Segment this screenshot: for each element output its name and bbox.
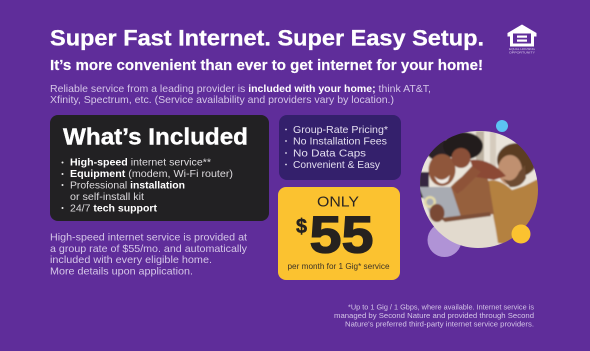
man's hair (497, 143, 537, 177)
icon: yellow circle (512, 224, 530, 244)
icon: equal housing opportunity logo (508, 24, 536, 54)
panel: benefits list: Convenient & Easy (293, 160, 381, 171)
text block: rate description: a group rate of $55/mo. and automatically (50, 244, 248, 255)
subtitle: It’s more convenient than ever to get internet for your home! (50, 58, 483, 74)
icon: equal housing opportunity logo: EQUAL HOUSING (509, 47, 535, 51)
intro paragraph (50, 84, 431, 106)
icon: equal housing opportunity logo: OPPORTUNITY (509, 50, 535, 54)
tablet (419, 187, 461, 217)
woman's shirt (450, 176, 494, 217)
footnote: managed by Second Nature and provided through Second (334, 311, 534, 320)
price caption: per month for 1 Gig* service (288, 261, 390, 271)
child's hair (443, 132, 483, 160)
icon: blue circle (496, 120, 508, 132)
infographic canvas (50, 24, 538, 328)
footnote: *Up to 1 Gig / 1 Gbps, where available. Internet service is (348, 302, 534, 312)
list of included items: 24/7 tech support (70, 204, 158, 214)
footnote (334, 302, 534, 328)
text block: rate description: More details upon application. (50, 266, 193, 278)
table surface (428, 216, 500, 248)
footnote: Nature's preferred third-party internet service providers. (345, 320, 534, 328)
list of included items: Professional installation (70, 180, 185, 192)
man's beard (503, 165, 526, 187)
child's arm (453, 166, 480, 193)
list of included items: Equipment (modem, Wi-Fi router) (70, 169, 233, 180)
child's back (470, 160, 506, 180)
list of included items: High-speed internet service** (70, 158, 211, 168)
panel: benefits list: No Data Caps (293, 148, 366, 160)
title: Super Fast Internet. Super Easy Setup. (50, 26, 484, 50)
panel: benefits list (279, 115, 401, 180)
woman's hair (427, 132, 443, 148)
price: dollar sign: $ (296, 216, 307, 238)
intro paragraph: Reliable service from a leading provider is included with your home; think AT&T, (50, 84, 431, 95)
woman's face (428, 154, 456, 186)
panel: benefits list: Group-Rate Pricing* (293, 125, 388, 136)
price: 55: 55 (310, 206, 374, 264)
panel: price callout (278, 187, 400, 280)
heading: what's included: What’s Included (63, 124, 248, 150)
panel: what's included (50, 115, 269, 221)
icon: lavender circle (428, 223, 462, 257)
text block: rate description (50, 232, 248, 278)
panel: benefits list: No Installation Fees (293, 136, 387, 148)
text block: rate description: High-speed internet service is provided at (50, 232, 247, 244)
child's face (452, 148, 470, 168)
woman's hand (430, 204, 444, 222)
text block: rate description: included with every eligible home. (50, 255, 212, 266)
intro paragraph: Xfinity, Spectrum, etc. (Service availability and providers vary by location.) (50, 95, 394, 106)
label: only: ONLY (317, 194, 359, 210)
list of included items: or self-install kit (70, 192, 144, 203)
photo: family with tablet (418, 120, 540, 257)
man's shirt (485, 178, 540, 244)
man's face (498, 155, 522, 185)
list of included items (62, 158, 233, 214)
